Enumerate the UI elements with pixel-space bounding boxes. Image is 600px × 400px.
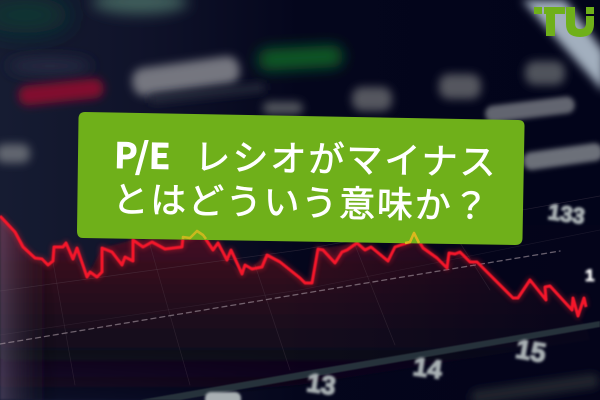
dim bottom-right data <box>470 373 600 400</box>
line showing through panel <box>183 231 206 239</box>
logo: TU <box>534 7 594 37</box>
label 14: 14 <box>411 351 445 385</box>
red area under line <box>0 216 590 400</box>
red price line <box>0 216 586 316</box>
partial axis label blob <box>205 392 241 400</box>
title line 2: とはどういう意味か？ <box>112 171 491 230</box>
label 15: 15 <box>513 334 548 369</box>
line showing through panel, right <box>405 233 419 243</box>
title panel <box>77 112 525 245</box>
diagonal light streak <box>522 0 600 92</box>
red price line glow <box>0 216 586 316</box>
title line 1: P/E レシオがマイナス <box>114 127 498 186</box>
label 1: 1 <box>585 266 594 285</box>
blurred screen data <box>0 0 600 171</box>
chart grid <box>0 196 600 385</box>
title text <box>112 127 498 230</box>
label 13: 13 <box>305 367 338 400</box>
left edge glow below line <box>0 216 60 400</box>
axis labels <box>305 199 594 400</box>
red area right fade <box>332 244 588 348</box>
label 133: 133 <box>547 199 586 229</box>
x-axis bar <box>140 321 600 400</box>
